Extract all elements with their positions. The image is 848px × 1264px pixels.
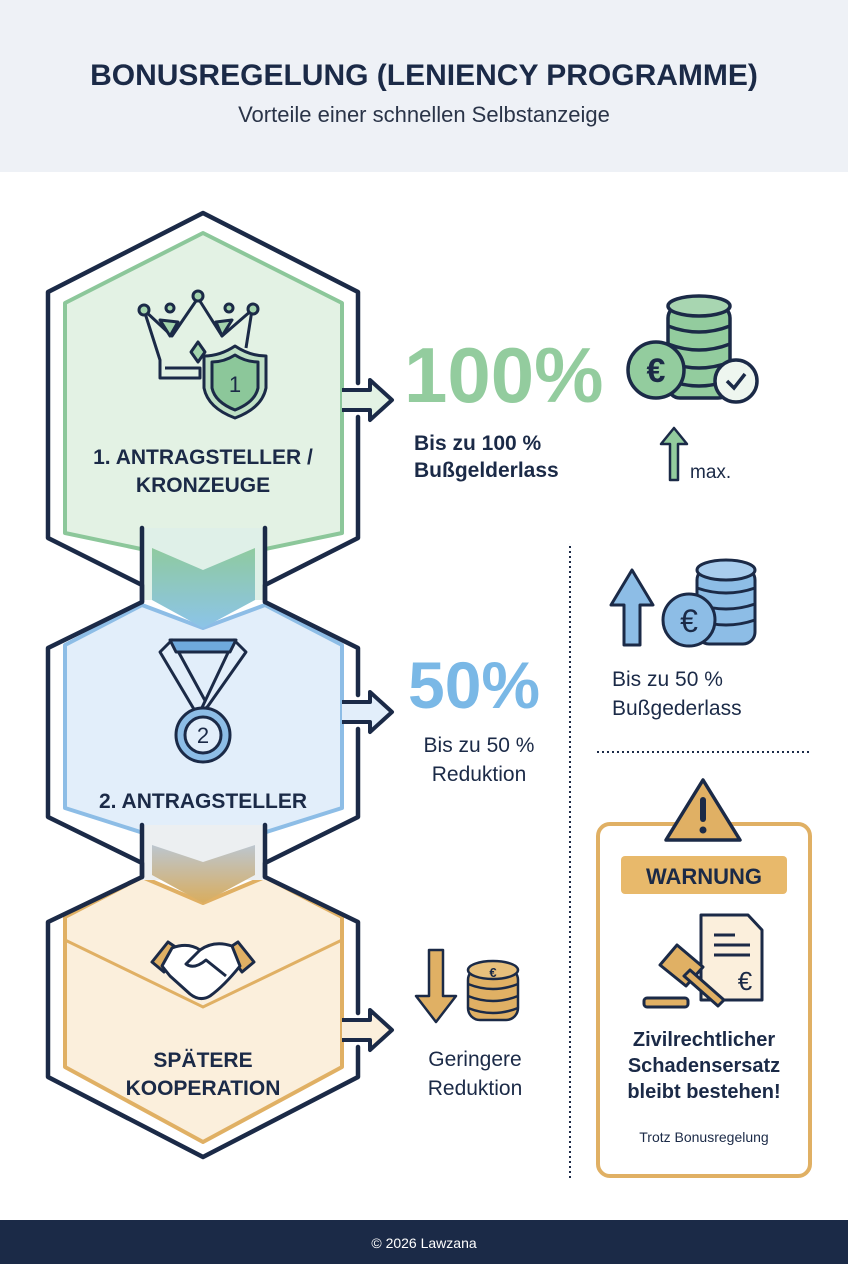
text: bis zu 50 bussgelderlass: Bis zu 50 %	[612, 668, 723, 691]
text: geringere reduktion	[428, 1048, 522, 1100]
text: KRONZEUGE	[136, 474, 270, 497]
stat: 50%: 50%	[408, 648, 540, 722]
text: KOOPERATION	[126, 1077, 280, 1100]
icon: handshake	[152, 942, 254, 999]
text: warning message: Zivilrechtlicher	[633, 1029, 775, 1051]
icon: warning triangle	[666, 780, 740, 840]
icon: up arrow blue coins: €	[680, 603, 698, 639]
icon: up arrow blue coins	[611, 560, 755, 646]
text: warning message: Trotz Bonusregelung	[639, 1129, 769, 1145]
icon: coin stack green with check: €	[647, 352, 666, 390]
icon: gavel and document	[644, 915, 762, 1007]
dotted dividers	[569, 546, 571, 1180]
badge: warnung	[621, 856, 787, 894]
text: geringere reduktion: Reduktion	[428, 1077, 522, 1100]
arrow 2	[342, 692, 392, 732]
text: bis zu 50 reduktion	[424, 734, 534, 786]
stat: 100%: 100%	[404, 331, 604, 419]
text: bis zu 50 bussgelderlass: Bußgederlass	[612, 697, 742, 720]
icon: crown with shield: 1	[229, 372, 241, 397]
icon: down arrow coins: €	[489, 965, 497, 980]
header band	[0, 0, 848, 172]
icon: gavel and document: €	[738, 966, 753, 996]
text: warning message	[627, 1029, 781, 1145]
text: bis zu 50 bussgelderlass	[612, 668, 742, 720]
connector 2	[142, 825, 265, 903]
text: geringere reduktion: Geringere	[428, 1048, 522, 1071]
inner: tan hex	[65, 877, 342, 1142]
icon: down arrow coins	[416, 950, 518, 1022]
arrow 1	[342, 380, 392, 420]
inner: green hex	[65, 233, 342, 562]
subtitle: Vorteile einer schnellen Selbstanzeige	[238, 102, 610, 127]
text: bis zu 100: Bußgelderlass	[414, 459, 559, 482]
title: BONUSREGELUNG (LENIENCY PROGRAMME)	[90, 59, 758, 92]
label 1: 1. ANTRAGSTELLER /	[93, 446, 313, 469]
text: bis zu 50 reduktion: Bis zu 50 %	[424, 734, 534, 757]
warning box	[598, 780, 810, 1176]
connector 1	[142, 528, 265, 628]
text: bis zu 50 reduktion: Reduktion	[432, 763, 526, 786]
icon: crown with shield	[139, 291, 266, 418]
icon: up arrow max: max.	[690, 462, 731, 483]
outer outline	[48, 213, 358, 1157]
text: warning message: bleibt bestehen!	[627, 1081, 781, 1103]
text: warning message: Schadensersatz	[628, 1055, 780, 1077]
inner: blue hex	[65, 605, 342, 852]
text: bis zu 100	[414, 432, 559, 482]
label 2: 2. ANTRAGSTELLER	[99, 790, 307, 813]
icon: coin stack green with check	[628, 296, 757, 402]
text: bis zu 100: Bis zu 100 %	[414, 432, 542, 455]
footer: © 2026 Lawzana	[371, 1235, 477, 1251]
badge: warnung: WARNUNG	[646, 864, 762, 889]
footer	[0, 1220, 848, 1264]
label 3: SPÄTERE	[153, 1049, 253, 1072]
arrow 3	[342, 1010, 392, 1050]
icon: medal	[160, 640, 246, 762]
icon: medal: 2	[197, 723, 209, 748]
icon: up arrow max	[661, 428, 731, 483]
hexagon chain	[48, 213, 358, 1157]
